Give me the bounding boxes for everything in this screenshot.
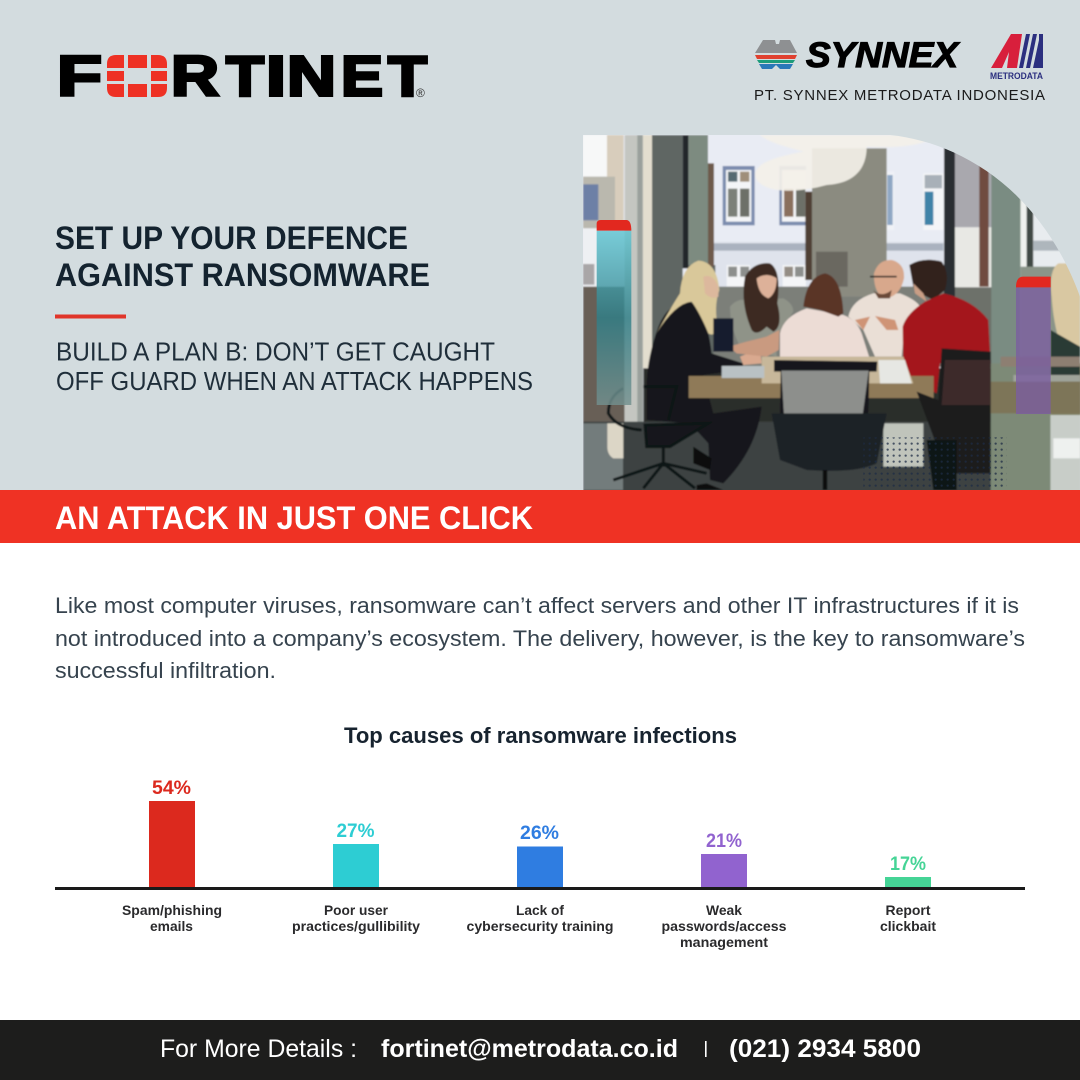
footer contact text: (021) 2934 5800: [729, 1035, 921, 1063]
category labels: Poor user: [324, 902, 389, 918]
logo: Fortinet: ®: [416, 86, 425, 100]
subheading: [56, 338, 533, 396]
logo: Fortinet: T: [226, 44, 264, 108]
building windows: [723, 166, 943, 287]
dot pattern: [863, 437, 1007, 489]
bar: poor user practices 27%: 27%: [336, 821, 375, 842]
red banner: [0, 490, 1080, 543]
category labels: Weak: [706, 902, 742, 918]
bar: weak passwords 21%: 21%: [706, 831, 742, 852]
subheading: BUILD A PLAN B: DON’T GET CAUGHT: [56, 338, 495, 366]
icon: Fortinet red grid: [107, 55, 167, 97]
bar: cybersecurity training 26%: 26%: [520, 823, 559, 844]
logo: Fortinet: I: [266, 44, 286, 108]
colour glass bars: [597, 220, 1051, 414]
heading divider: [55, 314, 126, 318]
logo: Fortinet: F: [57, 44, 102, 108]
heading: AGAINST RANSOMWARE: [55, 257, 430, 293]
reflected woman: [1050, 262, 1080, 348]
bar: spam/phishing emails 54%: [149, 778, 195, 888]
category labels: clickbait: [880, 918, 936, 934]
category labels: Lack of: [516, 902, 564, 918]
logo: Synnex: SYNNEX: [806, 36, 961, 75]
under-table shadow: [643, 368, 993, 423]
logo: Fortinet: N: [287, 44, 336, 108]
subheading: OFF GUARD WHEN AN ATTACK HAPPENS: [56, 368, 533, 396]
category labels: Spam/phishing: [122, 902, 222, 918]
footer contact text: [160, 1035, 921, 1063]
heading: SET UP YOUR DEFENCE: [55, 220, 408, 256]
company name: PT. SYNNEX METRODATA INDONESIA: [754, 87, 1045, 104]
bar: weak passwords 21%: [701, 831, 747, 888]
logo: Metrodata: METRODATA: [990, 71, 1043, 81]
body paragraph: [55, 593, 1025, 683]
chart title: Top causes of ransomware infections: [344, 723, 737, 748]
banner heading: AN ATTACK IN JUST ONE CLICK: [55, 500, 533, 536]
lower stone wall: [713, 287, 957, 367]
icon: Synnex emblem: [755, 40, 797, 69]
logo: Fortinet: [57, 44, 427, 108]
footer contact text: For More Details :: [160, 1035, 357, 1063]
bar: report clickbait 17%: 17%: [890, 854, 926, 875]
category labels: practices/gullibility: [292, 918, 420, 934]
logo: Fortinet: T: [388, 44, 427, 108]
logo: Fortinet: R: [171, 44, 219, 108]
bar chart: top causes: [55, 778, 1025, 950]
sky and building: [583, 135, 946, 490]
category labels: emails: [150, 918, 193, 934]
axis line: [55, 887, 1025, 890]
photo: team meeting behind glass: [580, 130, 1080, 497]
category labels: cybersecurity training: [466, 918, 614, 934]
bar: spam/phishing emails 54%: 54%: [152, 778, 191, 799]
blonde woman: [646, 261, 762, 490]
concrete pillar: [812, 148, 887, 297]
white content background: [0, 543, 1080, 1020]
woman with back turned: [779, 273, 870, 358]
floor: [583, 422, 993, 492]
lamp: [755, 135, 937, 191]
footer contact text: fortinet@metrodata.co.id: [381, 1035, 678, 1063]
right frames: [944, 145, 955, 298]
front chair: [772, 360, 887, 490]
body paragraph: Like most computer viruses, ransomware can’t affect servers and other IT infrastructures if it is: [55, 593, 1019, 618]
body paragraph: successful infiltration.: [55, 658, 276, 683]
left frames: [583, 135, 607, 177]
category labels: Report: [886, 902, 931, 918]
logo: Metrodata: [990, 34, 1043, 81]
woman with dark hair: [713, 263, 793, 357]
category labels: passwords/access: [662, 918, 787, 934]
man in red shirt: [903, 260, 991, 393]
heading: [55, 220, 430, 293]
footer bar: [0, 1020, 1080, 1080]
bald man: [848, 260, 920, 357]
header background: [0, 0, 1080, 490]
bar: report clickbait 17%: [885, 854, 931, 888]
category labels: [122, 902, 936, 950]
category labels: management: [680, 934, 768, 950]
green glass overlay: [991, 363, 1051, 492]
right chair: [917, 348, 991, 490]
table: [689, 376, 934, 398]
bar: poor user practices 27%: [333, 821, 379, 888]
logo: Fortinet: E: [341, 44, 383, 108]
logo: Synnex: [755, 36, 961, 75]
left office chair: [608, 387, 708, 488]
body paragraph: not introduced into a company’s ecosystem. The delivery, however, is the key to ransomware’s: [55, 626, 1025, 651]
bar: cybersecurity training 26%: [517, 823, 563, 888]
